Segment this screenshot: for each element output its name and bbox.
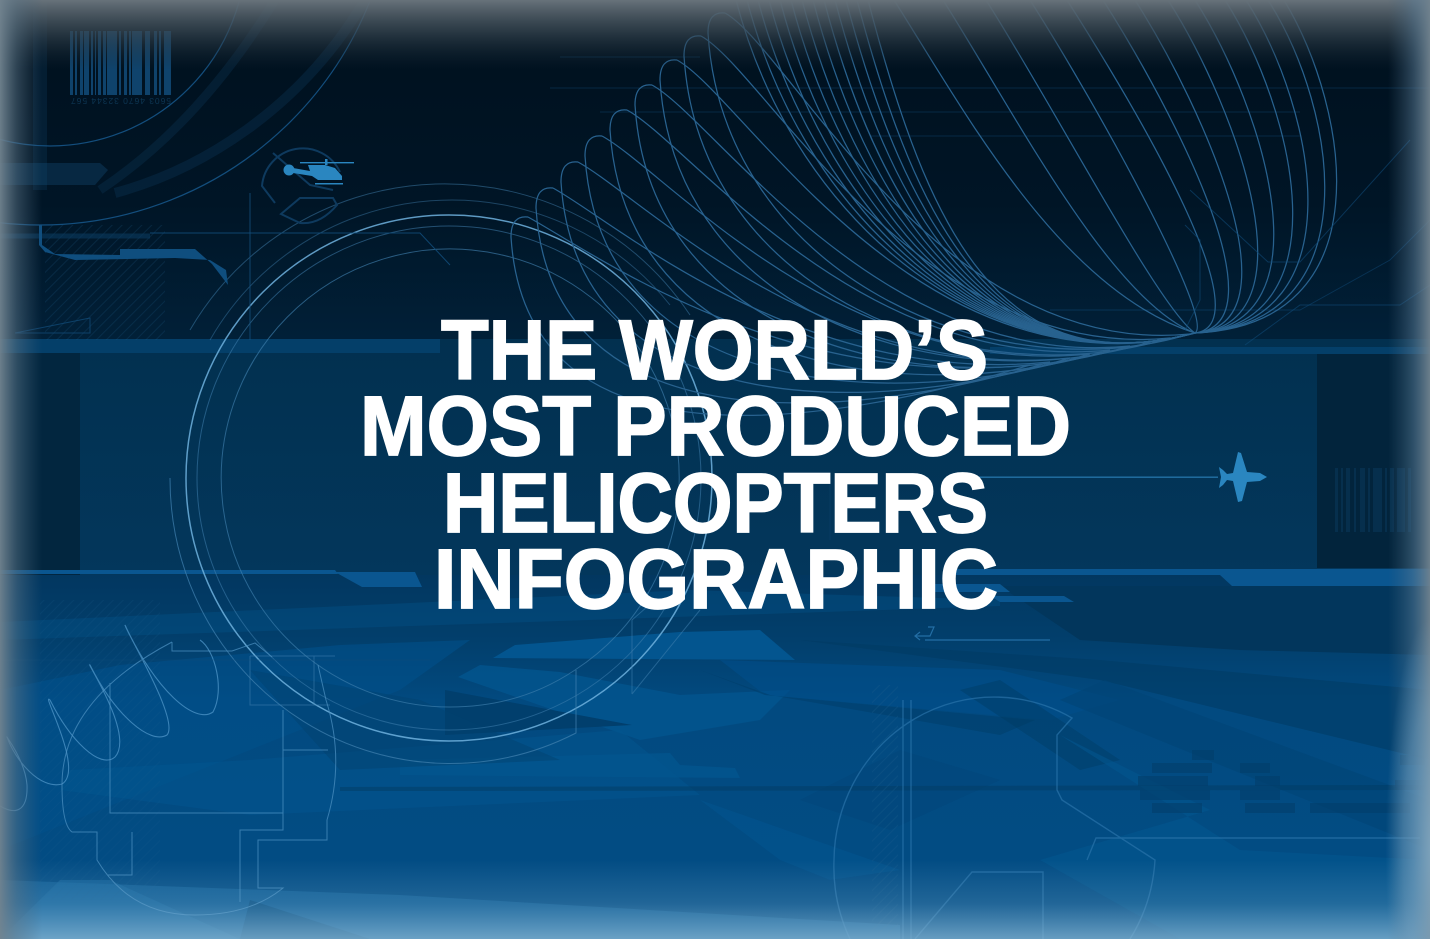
circuit trace, upper left bbox=[39, 225, 228, 285]
title: THE WORLD’S bbox=[441, 303, 988, 397]
spiral scribble, lower left bbox=[0, 625, 218, 811]
large target circle bbox=[170, 184, 712, 763]
return arrow bbox=[915, 627, 1050, 640]
title: MOST PRODUCED bbox=[360, 379, 1071, 473]
barcode, upper left bbox=[70, 31, 171, 106]
barcode, upper left: 5603 4670 32344 567 bbox=[71, 96, 171, 106]
icon: helicopter bbox=[262, 148, 354, 223]
title bbox=[360, 303, 1071, 626]
title: HELICOPTERS bbox=[443, 456, 988, 550]
stepped circle, lower left bbox=[62, 642, 336, 915]
icon: airplane with flight line bbox=[950, 452, 1267, 502]
circuit lines bbox=[0, 57, 1430, 660]
pixel grid blocks bbox=[1138, 750, 1430, 813]
title: INFOGRAPHIC bbox=[434, 532, 998, 626]
hatch panels bbox=[40, 225, 898, 939]
barcode, right bbox=[1335, 468, 1411, 532]
angular shapes in the lower section bbox=[0, 586, 1430, 939]
spring wireframe bbox=[511, 0, 1337, 415]
thin frames, upper right bbox=[1185, 140, 1430, 345]
accent bars bbox=[0, 569, 1430, 602]
stepped circle, lower right bbox=[834, 697, 1420, 939]
arcs, upper left bbox=[0, 0, 395, 333]
